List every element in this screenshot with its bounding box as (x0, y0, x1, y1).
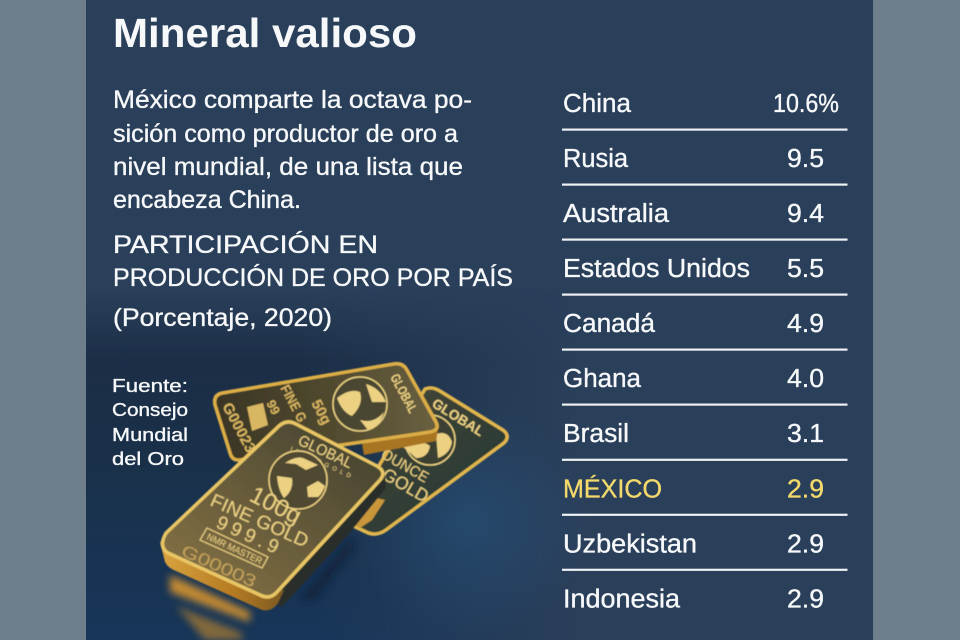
text block: source: Fuente: (112, 375, 188, 396)
row: China: 10.6% (773, 90, 839, 118)
gold bar: front 100g bar (160, 422, 383, 610)
gold bar: right ounce bar: OUNCE (378, 446, 432, 486)
row: Indonesia (563, 586, 824, 614)
gold bar: right ounce bar: GOLD (379, 464, 432, 506)
row: Estados Unidos (562, 255, 848, 296)
row: Indonesia: Indonesia (563, 586, 681, 614)
row: Rusia: 9.5 (787, 145, 824, 173)
title: Mineral valioso (113, 10, 417, 56)
gold bar: right ounce bar (345, 388, 507, 534)
row: Brasil (562, 420, 848, 461)
row: Australia: 9.4 (787, 200, 824, 228)
text block: intro paragraph: sición como productor de oro a (113, 120, 458, 148)
text block: intro paragraph: nivel mundial, de una lista que (113, 153, 463, 181)
row: Uzbekistan (562, 530, 848, 571)
gold bar: back 50g bar: GLOBAL (387, 371, 420, 415)
gold bar: back 50g bar: G00023 (218, 400, 259, 456)
heading: chart subtitle: PARTICIPACIÓN EN (113, 230, 378, 259)
row: Rusia (562, 145, 848, 186)
gold bar: back 50g bar (215, 364, 438, 460)
row: Canadá (562, 310, 848, 351)
row: Estados Unidos: 5.5 (787, 255, 824, 283)
gold bar: right ounce bar: GLOBAL (429, 395, 487, 440)
text block: source: Consejo (112, 399, 188, 420)
text block: intro paragraph: encabeza China. (113, 186, 301, 214)
row: Australia (562, 200, 848, 241)
text block: intro paragraph: México comparte la octava po- (113, 86, 472, 114)
gold bar: front 100g bar: 999.9 (213, 512, 282, 558)
gold bar: back 50g bar: FINE G (277, 382, 310, 425)
row: México (highlighted) (562, 474, 848, 516)
heading: chart subtitle (113, 230, 513, 332)
row: Estados Unidos: Estados Unidos (563, 255, 750, 283)
gold bar: front 100g bar: 100g (245, 481, 306, 530)
text block: source: Mundial (112, 424, 188, 445)
gold bar: back 50g bar: 50g (307, 397, 335, 428)
gold bar reflection (170, 540, 355, 640)
row: Rusia: Rusia (563, 145, 629, 173)
row: Brasil: Brasil (563, 420, 629, 448)
row: Uzbekistan: 2.9 (787, 530, 824, 558)
gold bar: front 100g bar: G00003 (178, 541, 259, 591)
row: México (highlighted): 2.9 (787, 476, 824, 504)
row: Canadá: 4.9 (787, 310, 824, 338)
text block: intro paragraph (113, 86, 472, 214)
row: Ghana: 4.0 (787, 365, 824, 393)
row: China (562, 90, 848, 131)
gold bar: front 100g bar: INTERGOLD (289, 446, 352, 480)
gold bar: shadow side (270, 474, 386, 607)
gold bar: front 100g bar: NMR MASTER (205, 532, 264, 567)
row: Ghana: Ghana (563, 365, 642, 393)
row: Ghana (562, 365, 848, 406)
row: Indonesia: 2.9 (787, 586, 824, 614)
gold bar: front 100g bar: FINE GOLD (207, 490, 311, 552)
illustration: gold bars (160, 364, 507, 640)
row: México (highlighted): MÉXICO (563, 474, 662, 504)
table: gold production by country (562, 90, 848, 614)
text block: source (112, 375, 188, 469)
heading: chart subtitle: PRODUCCIÓN DE ORO POR PAÍS (113, 263, 513, 292)
row: Australia: Australia (563, 200, 670, 228)
gold bar: front 100g bar: GLOBAL (295, 432, 355, 472)
row: Brasil: 3.1 (787, 420, 824, 448)
row: Canadá: Canadá (563, 310, 656, 338)
text block: source: del Oro (112, 448, 184, 469)
heading: chart subtitle: (Porcentaje, 2020) (113, 304, 332, 332)
gold bar: back 50g bar: 99 (263, 397, 283, 417)
row: Uzbekistan: Uzbekistan (563, 530, 697, 558)
row: China: China (563, 90, 632, 118)
